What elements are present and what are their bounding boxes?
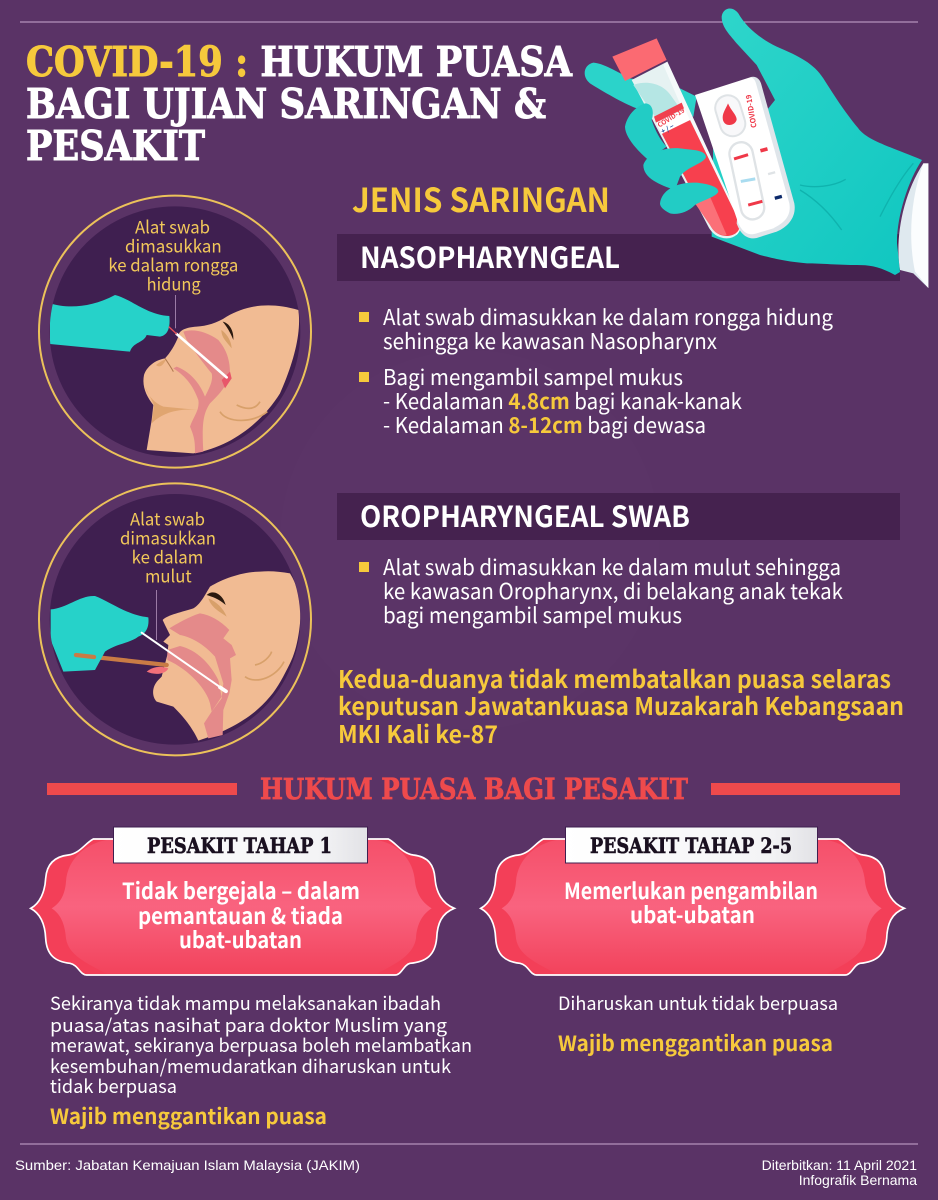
nasopharyngeal bullet list: - Kedalaman 4.8cm bagi kanak-kanak bbox=[383, 385, 742, 416]
bottom rule bbox=[20, 1144, 918, 1145]
title: COVID-19 : HUKUM PUASA bbox=[26, 38, 573, 86]
nasopharyngeal bullet list bbox=[359, 301, 833, 440]
label: Alat swab bbox=[135, 213, 210, 238]
icon: glove bbox=[51, 596, 149, 672]
icon: rapid test card: COVID-19 bbox=[743, 94, 760, 129]
nasopharyngeal bullet list: - Kedalaman 8-12cm bagi dewasa bbox=[383, 409, 706, 440]
nasopharyngeal bullet list: Bagi mengambil sampel mukus bbox=[383, 361, 683, 392]
title: PESAKIT bbox=[26, 122, 205, 170]
label: dimasukkan bbox=[125, 232, 222, 257]
text block: tahap 1: tidak berpuasa bbox=[50, 1073, 177, 1099]
panel: pesakit tahap 1: pemantauan & tiada bbox=[138, 899, 343, 931]
label: dimasukkan bbox=[120, 524, 216, 549]
callout: ruling on swabs: Kedua-duanya tidak membatalkan puasa selaras bbox=[338, 660, 891, 695]
nasopharyngeal bullet list: Alat swab dimasukkan ke dalam rongga hidung bbox=[383, 301, 833, 332]
icon: blood vial bbox=[612, 38, 741, 238]
icon: glove palm bbox=[712, 9, 922, 275]
illustration: nasopharyngeal swab bbox=[39, 196, 311, 468]
oropharyngeal bullet list: bagi mengambil sampel mukus bbox=[383, 599, 682, 630]
heading: Hukum puasa bagi pesakit bbox=[47, 772, 900, 806]
text block: tahap 1 bbox=[50, 990, 472, 1131]
label: ke dalam bbox=[132, 543, 203, 568]
text block: tahap 1: merawat, sekiranya berpuasa boleh melambatkan bbox=[50, 1032, 472, 1058]
icon: glove index finger bbox=[585, 63, 697, 117]
icon: tongue depressor bbox=[76, 655, 167, 665]
callout: ruling on swabs: MKI Kali ke-87 bbox=[338, 715, 498, 750]
section bar: Oropharyngeal swab bbox=[337, 493, 900, 540]
heading: Hukum puasa bagi pesakit: HUKUM PUASA BAGI PESAKIT bbox=[260, 772, 688, 806]
heading: Jenis Saringan: JENIS SARINGAN bbox=[352, 174, 610, 222]
panel: pesakit tahap 2-5 bbox=[481, 827, 904, 975]
text block: tahap 2-5: Diharuskan untuk tidak berpuasa bbox=[558, 990, 838, 1016]
text block: tahap 1: puasa/atas nasihat para doktor Muslim yang bbox=[50, 1012, 448, 1038]
text block: tahap 1: Wajib menggantikan puasa bbox=[50, 1101, 327, 1131]
panel: pesakit tahap 1 bbox=[31, 827, 454, 975]
icon: blood vial: COVID-19 bbox=[655, 105, 686, 129]
label: hidung bbox=[147, 270, 201, 295]
section bar: Nasopharyngeal bbox=[337, 234, 900, 281]
oropharyngeal bullet list: Alat swab dimasukkan ke dalam mulut sehingga bbox=[383, 551, 841, 582]
text block: tahap 1: Sekiranya tidak mampu melaksanakan ibadah bbox=[50, 990, 441, 1016]
source: Sumber: Jabatan Kemajuan Islam Malaysia (JAKIM) bbox=[15, 1157, 360, 1173]
icon: swab bbox=[142, 633, 227, 692]
icon: blood vial: + / − bbox=[659, 121, 676, 136]
icon: glove bbox=[50, 295, 170, 352]
tag: PESAKIT TAHAP 2-5 bbox=[590, 833, 792, 858]
publication credit bbox=[762, 1157, 917, 1188]
panel: pesakit tahap 1: ubat-ubatan bbox=[179, 923, 302, 955]
panel: pesakit tahap 2-5: ubat-ubatan bbox=[630, 898, 755, 930]
plaque shape bbox=[31, 839, 454, 975]
text block: tahap 2-5 bbox=[558, 990, 838, 1058]
icon: glove fingers bbox=[625, 103, 718, 214]
icon: rapid test card bbox=[695, 77, 795, 238]
publication credit: Diterbitkan: 11 April 2021 bbox=[762, 1157, 917, 1173]
illustration: oropharyngeal swab bbox=[39, 483, 311, 755]
text block: tahap 1: kesembuhan/memudaratkan diharuskan untuk bbox=[50, 1053, 452, 1079]
icon: swab bbox=[177, 334, 227, 377]
face bbox=[143, 305, 299, 453]
panel: pesakit tahap 1: Tidak bergejala – dalam bbox=[122, 874, 360, 906]
oropharyngeal bullet list bbox=[359, 551, 843, 630]
tag bbox=[566, 827, 818, 863]
tag bbox=[114, 827, 368, 863]
icon: glove cuff bbox=[898, 163, 928, 288]
label: mulut bbox=[145, 562, 192, 587]
label bbox=[108, 213, 238, 295]
oropharyngeal bullet list: ke kawasan Oropharynx, di belakang anak tekak bbox=[383, 575, 843, 606]
label bbox=[120, 505, 216, 587]
label: Alat swab bbox=[130, 505, 205, 530]
illustration: gloved hand holding test kit bbox=[585, 9, 928, 288]
tag: PESAKIT TAHAP 1 bbox=[147, 833, 332, 858]
title bbox=[26, 38, 573, 170]
publication credit: Infografik Bernama bbox=[799, 1172, 917, 1188]
nasopharyngeal bullet list: sehingga ke kawasan Nasopharynx bbox=[383, 325, 717, 356]
section bar: Nasopharyngeal: NASOPHARYNGEAL bbox=[360, 235, 620, 277]
title: BAGI UJIAN SARINGAN & bbox=[26, 80, 546, 128]
panel: pesakit tahap 2-5: Memerlukan pengambilan bbox=[564, 874, 818, 906]
text block: tahap 2-5: Wajib menggantikan puasa bbox=[558, 1028, 833, 1058]
face bbox=[153, 571, 300, 741]
callout: ruling on swabs: keputusan Jawatankuasa Muzakarah Kebangsaan bbox=[338, 687, 904, 722]
plaque shape bbox=[481, 839, 904, 975]
top rule bbox=[20, 22, 918, 23]
callout: ruling on swabs bbox=[338, 660, 904, 750]
label: ke dalam rongga bbox=[108, 251, 238, 276]
section bar: Oropharyngeal swab: OROPHARYNGEAL SWAB bbox=[360, 494, 690, 536]
